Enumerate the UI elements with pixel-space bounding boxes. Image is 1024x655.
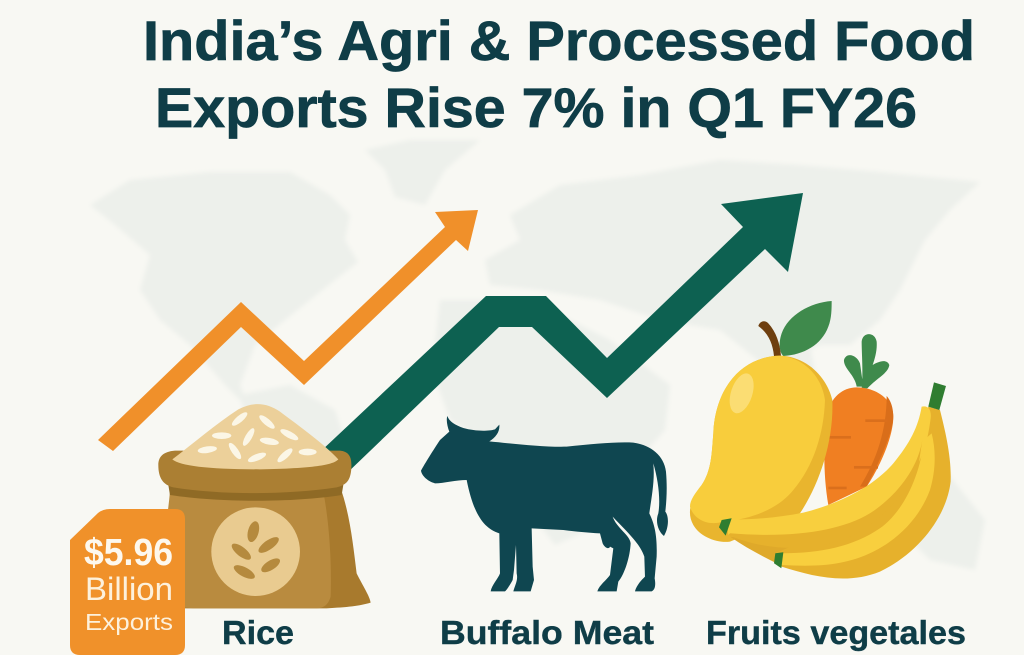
carrot body: [824, 387, 893, 505]
icon: rice sack: [150, 404, 371, 608]
background world map: [90, 140, 985, 570]
title: Exports Rise 7% in Q1 FY26: [155, 76, 917, 139]
banana stem: [928, 382, 946, 410]
icon: fruits and vegetables: [690, 301, 951, 579]
mango leaf: [780, 301, 832, 356]
badge: $5.96 Billion Exports: Exports: [85, 609, 173, 635]
mango stem: [758, 321, 781, 356]
badge: $5.96 Billion Exports: [70, 509, 185, 655]
category label: Rice: Rice: [222, 614, 294, 651]
category label: Buffalo Meat: Buffalo Meat: [440, 614, 654, 651]
back banana and dark underside: [730, 537, 820, 565]
badge: $5.96 Billion Exports: $5.96: [84, 532, 173, 574]
orange rising arrow: [98, 210, 478, 451]
green rising arrow: [320, 193, 803, 475]
category label: Fruits vegetales: Fruits vegetales: [706, 614, 966, 651]
badge: $5.96 Billion Exports: Billion: [85, 571, 173, 607]
title: [143, 9, 975, 139]
mango body: [690, 356, 832, 542]
title: India’s Agri & Processed Food: [143, 9, 975, 72]
icon: buffalo silhouette: [421, 416, 668, 591]
front banana: [727, 406, 931, 542]
carrot top: [844, 334, 889, 388]
